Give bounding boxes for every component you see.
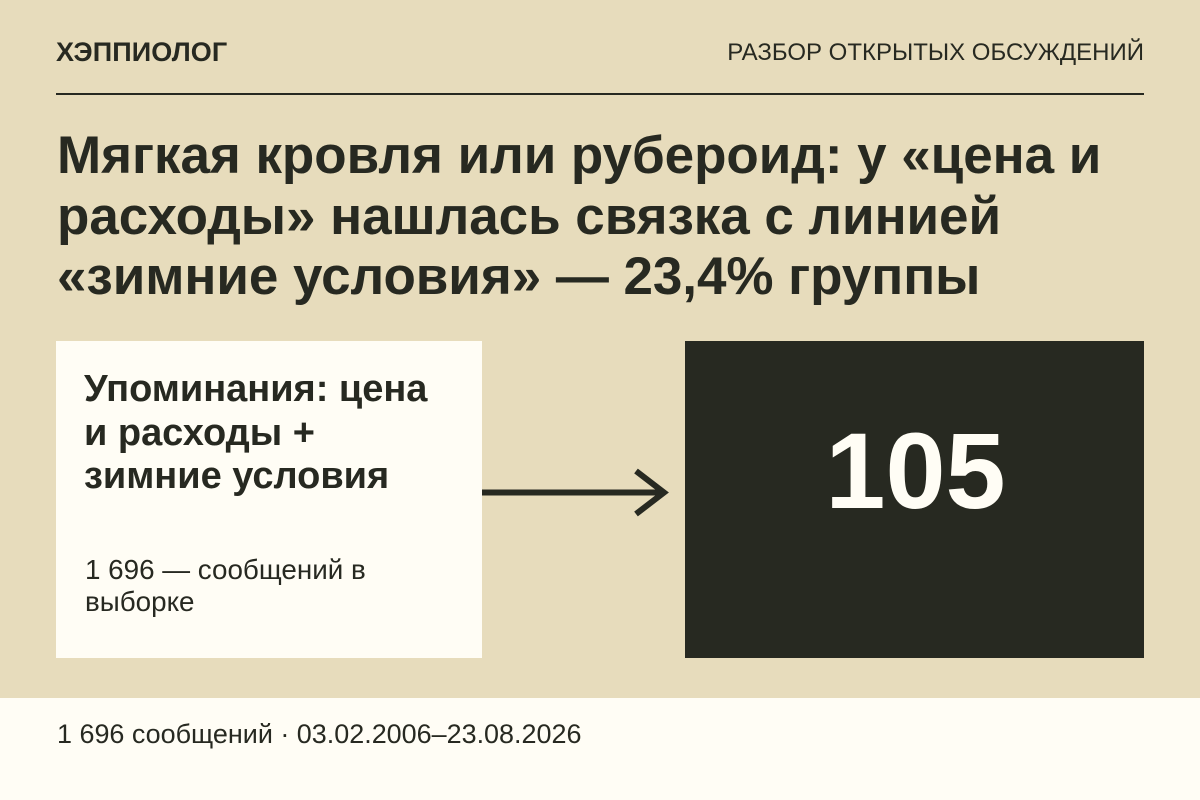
panel note: 1 696 — сообщений в — [85, 554, 366, 585]
panel heading: и расходы + — [84, 412, 315, 454]
result number: 105 — [825, 410, 1006, 531]
footer — [0, 698, 1200, 800]
section label: РАЗБОР ОТКРЫТЫХ ОБСУЖДЕНИЙ — [727, 39, 1144, 66]
panel note — [85, 554, 366, 617]
panel heading — [84, 368, 428, 497]
panel: mentions — [56, 341, 482, 658]
brand name: ХЭППИОЛОГ — [56, 37, 227, 67]
title — [57, 126, 1101, 306]
title: расходы» нашлась связка с линией — [57, 186, 1001, 246]
arrow — [482, 468, 669, 516]
title: «зимние условия» — 23,4% группы — [57, 247, 980, 306]
footer text: 1 696 сообщений · 03.02.2006–23.08.2026 — [57, 719, 581, 749]
panel note: выборке — [85, 586, 195, 616]
panel heading: Упоминания: цена — [84, 368, 427, 410]
panel: result — [685, 341, 1144, 658]
panel heading: зимние условия — [84, 455, 389, 497]
title: Мягкая кровля или рубероид: у «цена и — [57, 126, 1101, 185]
